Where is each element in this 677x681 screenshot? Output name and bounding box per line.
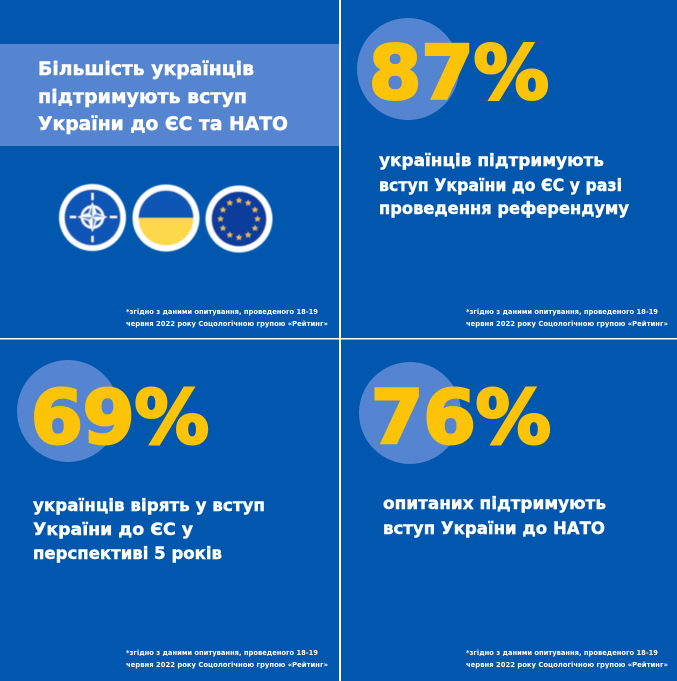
statement: проведення референдуму [379, 199, 629, 219]
statement: українців підтримують [379, 151, 604, 171]
icon: Ukraine flag badge [132, 184, 200, 252]
title: України до ЄС та НАТО [38, 113, 288, 135]
footnote: червня 2022 року Соцологічною групою «Рейтинг» [466, 320, 668, 328]
icon: EU flag badge [206, 186, 272, 252]
circle accent [359, 362, 461, 464]
circle accent [357, 18, 459, 120]
statement: опитаних підтримують [383, 494, 606, 514]
footnote [466, 649, 668, 669]
title banner [0, 44, 339, 146]
footnote: *згідно з даними опитування, проведеного 18-19 [126, 649, 318, 657]
title [38, 58, 288, 135]
panel: 76 percent [341, 340, 677, 681]
icon: NATO badge [59, 184, 126, 251]
title: Більшість українців [38, 58, 254, 80]
footnote: червня 2022 року Соцологічною групою «Рейтинг» [466, 661, 668, 669]
statement [379, 151, 629, 219]
footnote: червня 2022 року Соцологічною групою «Рейтинг» [126, 320, 328, 328]
title: підтримують вступ [38, 86, 247, 108]
footnote: *згідно з даними опитування, проведеного 18-19 [126, 308, 318, 316]
statement [33, 496, 265, 564]
footnote: *згідно з даними опитування, проведеного 18-19 [466, 649, 658, 657]
statement: України до ЄС у [33, 520, 193, 540]
footnote [466, 308, 668, 328]
statement: українців вірять у вступ [33, 496, 265, 516]
footnote: *згідно з даними опитування, проведеного 18-19 [466, 308, 658, 316]
statement: перспективі 5 років [33, 544, 222, 564]
footnote: червня 2022 року Соцологічною групою «Рейтинг» [126, 661, 328, 669]
statement: вступ України до ЄС у разі [379, 176, 622, 196]
big number: 87% [369, 30, 549, 116]
panel: 69 percent [0, 340, 339, 681]
statement: вступ України до НАТО [383, 519, 605, 539]
footnote [126, 308, 328, 328]
statement [383, 494, 606, 539]
footnote [126, 649, 328, 669]
circle accent [17, 360, 119, 462]
big number: 76% [371, 375, 551, 461]
panel: title and flags [0, 0, 339, 338]
big number: 69% [31, 375, 209, 461]
panel: 87 percent [341, 0, 677, 338]
